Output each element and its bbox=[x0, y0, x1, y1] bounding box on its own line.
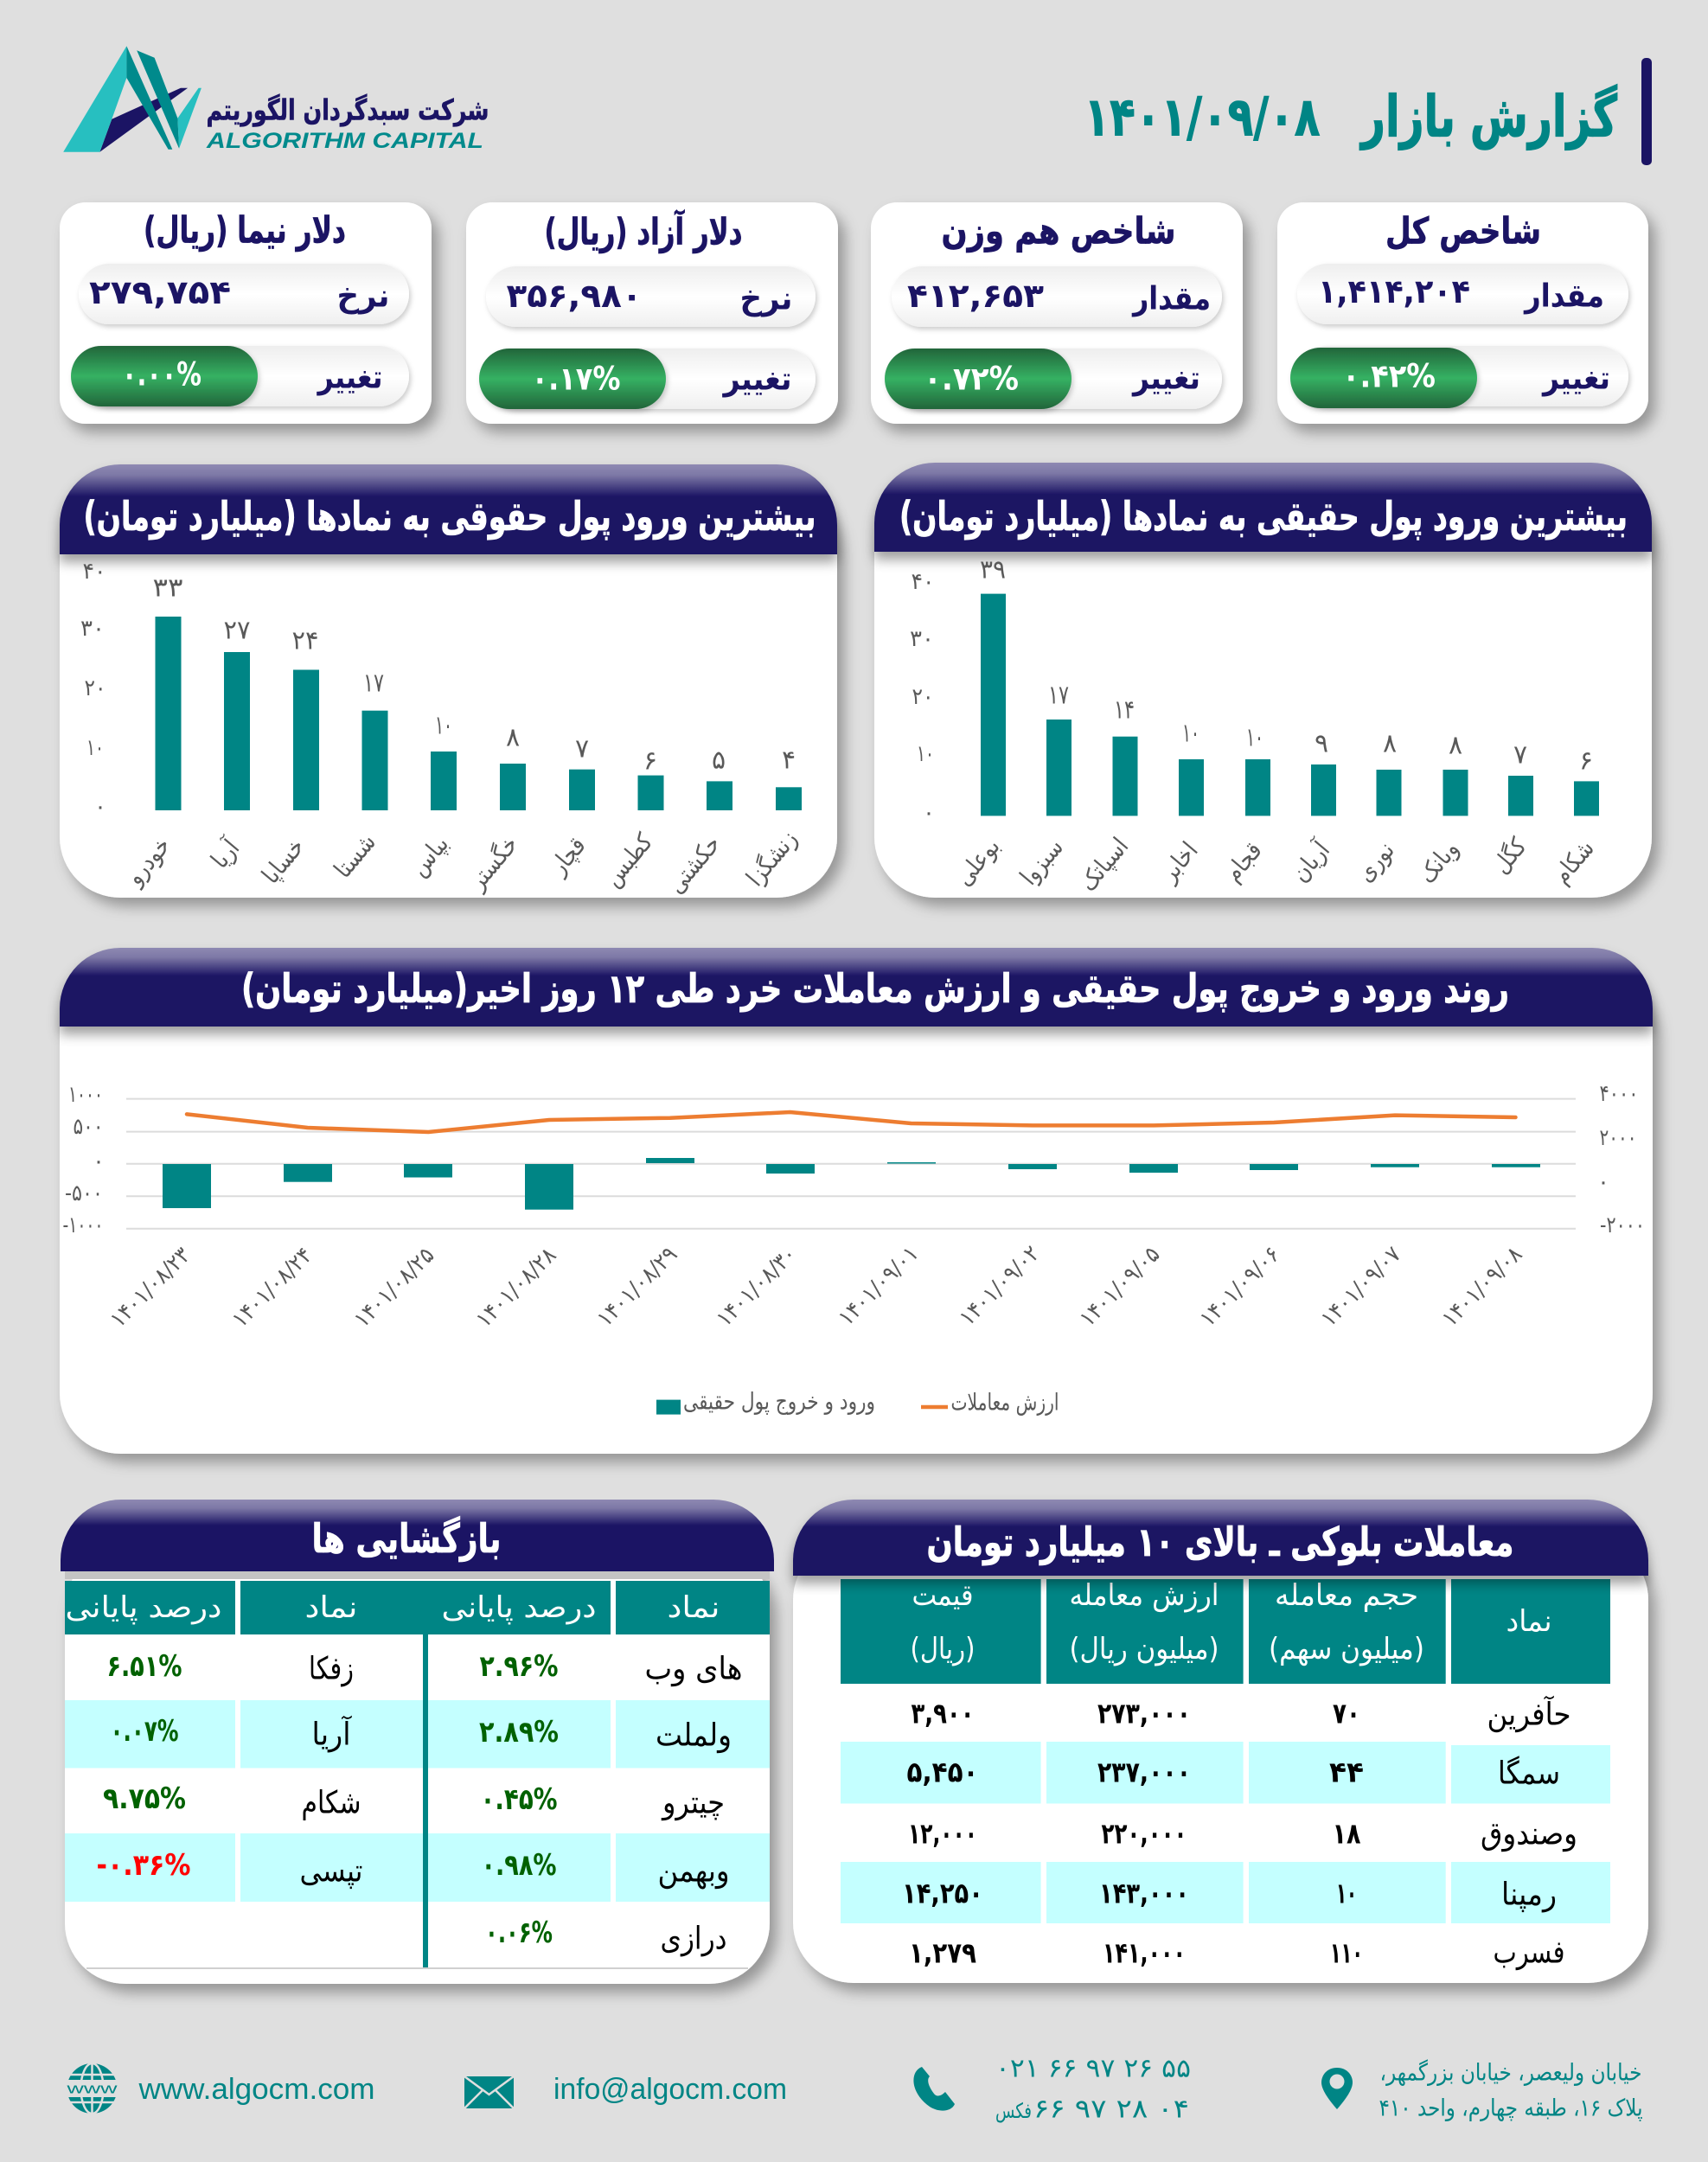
left axis labels: ۰ bbox=[93, 1148, 105, 1174]
rate pill: نرخ bbox=[337, 277, 389, 315]
fax number: فکس bbox=[995, 2099, 1032, 2123]
change pill bbox=[479, 349, 816, 409]
category labels: آریان bbox=[1285, 835, 1336, 888]
category labels bbox=[950, 832, 1600, 897]
date labels: ۱۴۰۱/۰۹/۰۱ bbox=[834, 1241, 924, 1331]
data labels: ۱۰ bbox=[435, 711, 452, 740]
data labels bbox=[980, 555, 1593, 777]
row: vasandogh: ۲۲۰,۰۰۰ bbox=[1102, 1816, 1187, 1851]
panel: block trades table bbox=[793, 1500, 1648, 1983]
category labels: خساپا bbox=[257, 834, 310, 889]
y axis labels: ۳۰ bbox=[910, 626, 934, 652]
trading value line bbox=[187, 1112, 1515, 1132]
value pill bbox=[1297, 264, 1628, 324]
left percents bbox=[97, 1649, 190, 1883]
y axis labels: ۴۰ bbox=[83, 559, 106, 585]
card: equal weight index bbox=[871, 202, 1243, 424]
website: www.algocm.com bbox=[138, 2073, 375, 2106]
column headings: (میلیون سهم) bbox=[1269, 1632, 1424, 1666]
panel header: معاملات بلوکی ـ بالای ۱۰ میلیارد تومان bbox=[927, 1519, 1513, 1565]
panel header: بازگشایی ها bbox=[311, 1515, 502, 1562]
right percents: ۰.۰۶% bbox=[485, 1916, 553, 1950]
data labels: ۳۳ bbox=[152, 572, 183, 604]
category labels: شکام bbox=[1548, 835, 1600, 890]
date labels: ۱۴۰۱/۰۹/۰۵ bbox=[1075, 1242, 1165, 1332]
category labels: بپاس bbox=[405, 830, 455, 882]
data labels: ۸ bbox=[506, 723, 520, 752]
category labels: آریا bbox=[205, 833, 246, 874]
data labels: ۱۷ bbox=[363, 668, 384, 699]
category labels: اسپاتک bbox=[1074, 833, 1135, 897]
row: semga: ۵,۴۵۰ bbox=[906, 1756, 979, 1788]
row: fasrob: ۱۴۱,۰۰۰ bbox=[1103, 1935, 1186, 1970]
right axis labels: ۴۰۰۰ bbox=[1600, 1081, 1638, 1107]
table bbox=[65, 1581, 770, 1969]
category labels: حکشتی bbox=[662, 830, 726, 899]
category labels: سبزوا bbox=[1015, 834, 1069, 891]
row: semga: ۴۴ bbox=[1329, 1756, 1364, 1788]
rate pill bbox=[486, 266, 816, 327]
row: vasandogh: وصندوق bbox=[1481, 1816, 1577, 1852]
right symbols: چیترو bbox=[661, 1785, 725, 1821]
change pill bbox=[885, 349, 1222, 409]
right symbols bbox=[645, 1652, 742, 1956]
panel: real money inflow chart bbox=[874, 463, 1652, 898]
flow bars bbox=[163, 1158, 1540, 1210]
change pill bbox=[71, 346, 409, 406]
card title: دلار نیما (ریال) bbox=[144, 209, 346, 251]
y axis labels: ۴۰ bbox=[912, 569, 934, 595]
row: vasandogh: ۱۲,۰۰۰ bbox=[908, 1816, 977, 1851]
category labels: شستا bbox=[329, 828, 381, 884]
report date: ۱۴۰۱/۰۹/۰۸ bbox=[1084, 85, 1320, 149]
bars bbox=[156, 617, 802, 810]
row: fasrob: فسرب bbox=[1493, 1935, 1565, 1970]
striped rows bbox=[841, 1742, 1610, 1923]
icon: globe bbox=[66, 2063, 118, 2114]
right axis labels bbox=[1597, 1081, 1645, 1238]
data labels: ۶ bbox=[1579, 745, 1593, 777]
row: vasandogh: ۱۸ bbox=[1332, 1816, 1361, 1851]
data labels: ۳۹ bbox=[980, 555, 1006, 585]
row: hafarin: ۷۰ bbox=[1333, 1697, 1360, 1730]
change pill: تغییر bbox=[317, 358, 382, 396]
left percents: ۶.۵۱% bbox=[107, 1649, 182, 1684]
card title: شاخص هم وزن bbox=[941, 209, 1176, 253]
panel: institutional money inflow chart bbox=[60, 464, 837, 899]
data labels: ۱۴ bbox=[1114, 695, 1135, 725]
panel: reopenings table bbox=[61, 1500, 774, 1984]
data labels bbox=[152, 572, 796, 777]
card: nima dollar bbox=[60, 202, 432, 424]
address: پلاک ۱۶، طبقه چهارم، واحد ۴۱۰ bbox=[1379, 2095, 1643, 2122]
left axis labels: ۵۰۰ bbox=[73, 1114, 104, 1140]
panel header bbox=[60, 464, 837, 554]
change pill: ۰.۰۰% bbox=[122, 356, 202, 393]
date labels: ۱۴۰۱/۰۸/۳۰ bbox=[712, 1242, 802, 1332]
row: hafarin: حآفرین bbox=[1487, 1695, 1570, 1733]
legend: ارزش معاملات bbox=[951, 1389, 1059, 1417]
table bbox=[841, 1578, 1610, 1970]
change pill bbox=[1290, 346, 1628, 408]
date labels: ۱۴۰۱/۰۸/۲۳ bbox=[106, 1243, 195, 1333]
panel header bbox=[61, 1500, 774, 1579]
right axis labels: ۰ bbox=[1597, 1169, 1609, 1195]
left percents: ۹.۷۵% bbox=[103, 1781, 186, 1816]
right symbols: ولملت bbox=[656, 1717, 732, 1754]
row: fasrob bbox=[909, 1935, 1565, 1970]
date labels: ۱۴۰۱/۰۸/۲۸ bbox=[471, 1243, 561, 1333]
row: fasrob: ۱,۲۷۹ bbox=[909, 1935, 976, 1970]
row: hafarin: ۲۷۳,۰۰۰ bbox=[1097, 1697, 1191, 1730]
data labels: ۱۰ bbox=[1182, 718, 1199, 749]
y axis labels: ۲۰ bbox=[912, 684, 934, 710]
left axis labels: -۱۰۰۰ bbox=[62, 1212, 104, 1238]
change pill: ۰.۴۲% bbox=[1342, 358, 1436, 394]
column headings bbox=[910, 1578, 1551, 1666]
date labels: ۱۴۰۱/۰۹/۰۲ bbox=[955, 1241, 1045, 1331]
icon: globe: www bbox=[66, 2081, 118, 2096]
date labels: ۱۴۰۱/۰۹/۰۷ bbox=[1316, 1242, 1406, 1332]
left axis labels: ۱۰۰۰ bbox=[68, 1082, 103, 1108]
data labels: ۲۷ bbox=[223, 616, 251, 645]
right percents: ۰.۴۵% bbox=[481, 1782, 557, 1817]
data labels: ۲۴ bbox=[292, 626, 318, 656]
value pill bbox=[892, 266, 1222, 327]
data labels: ۱۷ bbox=[1048, 680, 1069, 711]
column headings: نماد bbox=[668, 1590, 720, 1625]
category labels: کگل bbox=[1487, 832, 1532, 880]
striped rows bbox=[65, 1700, 770, 1902]
company name latin: ALGORITHM CAPITAL bbox=[206, 129, 483, 153]
column headings: نماد bbox=[304, 1590, 358, 1625]
address bbox=[1379, 2058, 1643, 2122]
column headings: حجم معامله bbox=[1275, 1578, 1418, 1613]
bars bbox=[981, 594, 1599, 816]
fax number: ۶۶ ۹۷ ۲۸ ۰۴ bbox=[1033, 2095, 1189, 2124]
category labels: قجام bbox=[1219, 837, 1268, 887]
row: vasandogh bbox=[908, 1816, 1577, 1852]
rate pill: ۳۵۶,۹۸۰ bbox=[507, 277, 642, 315]
left symbols: آریا bbox=[311, 1714, 352, 1752]
card title: دلار آزاد (ریال) bbox=[545, 209, 742, 253]
card title: شاخص کل bbox=[1385, 209, 1541, 253]
value pill: مقدار bbox=[1131, 280, 1211, 317]
phone number: ۰۲۱ ۶۶ ۹۷ ۲۶ ۵۵ bbox=[995, 2053, 1191, 2084]
left axis labels: -۵۰۰ bbox=[65, 1180, 103, 1206]
row: hafarin: ۳,۹۰۰ bbox=[912, 1697, 974, 1730]
left symbols: شکام bbox=[301, 1785, 361, 1821]
category labels: نوری bbox=[1352, 837, 1400, 887]
right symbols: درازی bbox=[661, 1922, 726, 1956]
left symbols: زفکا bbox=[309, 1652, 354, 1686]
table header cells bbox=[841, 1579, 1610, 1684]
change pill: تغییر bbox=[722, 360, 792, 398]
row: fasrob: ۱۱۰ bbox=[1330, 1935, 1363, 1970]
y axis labels bbox=[80, 559, 106, 820]
column headings: درصد پایانی bbox=[441, 1590, 597, 1625]
data labels: ۷ bbox=[575, 733, 589, 764]
right percents bbox=[479, 1649, 559, 1950]
column headings: (میلیون ریال) bbox=[1069, 1632, 1219, 1666]
row: remapna: ۱۰ bbox=[1336, 1877, 1357, 1909]
card: free dollar bbox=[466, 202, 838, 424]
left symbols: تپسی bbox=[299, 1854, 363, 1889]
row: remapna: رمپنا bbox=[1501, 1877, 1557, 1913]
right axis labels: -۲۰۰۰ bbox=[1600, 1212, 1645, 1238]
change pill: ۰.۷۲% bbox=[924, 360, 1019, 398]
row: remapna: ۱۴۳,۰۰۰ bbox=[1099, 1877, 1189, 1909]
category labels: وبانک bbox=[1413, 835, 1465, 889]
rate pill bbox=[79, 264, 409, 324]
change pill: ۰.۱۷% bbox=[531, 360, 621, 398]
address: خیابان ولیعصر، خیابان بزرگمهر، bbox=[1380, 2058, 1641, 2086]
header cells bbox=[65, 1581, 770, 1634]
email: info@algocm.com bbox=[553, 2073, 787, 2106]
date labels: ۱۴۰۱/۰۸/۲۹ bbox=[592, 1242, 682, 1332]
panel header: بیشترین ورود پول حقوقی به نمادها (میلیارد تومان) bbox=[83, 493, 816, 540]
right percents: ۲.۹۶% bbox=[479, 1649, 559, 1684]
data labels: ۸ bbox=[1449, 730, 1462, 761]
column headings bbox=[66, 1590, 720, 1625]
right symbols: های وب bbox=[645, 1652, 742, 1686]
category labels: زنشگزا bbox=[740, 825, 803, 892]
date labels: ۱۴۰۱/۰۹/۰۶ bbox=[1195, 1242, 1285, 1332]
column headings: ارزش معامله bbox=[1069, 1578, 1219, 1613]
left percents: -۰.۳۶% bbox=[97, 1848, 190, 1883]
right axis labels: ۲۰۰۰ bbox=[1600, 1125, 1636, 1151]
right percents: ۲.۸۹% bbox=[479, 1715, 559, 1749]
row: remapna bbox=[902, 1877, 1557, 1913]
date labels: ۱۴۰۱/۰۸/۲۵ bbox=[349, 1243, 439, 1333]
y axis labels: ۱۰ bbox=[86, 735, 104, 761]
category labels: بوعلی bbox=[950, 833, 1006, 892]
card: total index bbox=[1277, 202, 1648, 424]
date labels bbox=[106, 1241, 1527, 1333]
legend: ورود و خروج پول حقیقی bbox=[683, 1389, 875, 1415]
data labels: ۸ bbox=[1383, 728, 1397, 759]
value pill: ۴۱۲,۶۵۳ bbox=[907, 277, 1044, 315]
icon: mail bbox=[464, 2076, 514, 2108]
icon: location pin bbox=[1321, 2068, 1353, 2109]
footer bbox=[66, 2053, 1643, 2124]
date labels: ۱۴۰۱/۰۹/۰۸ bbox=[1437, 1242, 1527, 1332]
panel: 12 day trend chart bbox=[60, 948, 1653, 1454]
right symbols: وبهمن bbox=[657, 1854, 730, 1889]
row: semga: سمگا bbox=[1498, 1756, 1560, 1792]
data labels: ۴ bbox=[782, 745, 796, 775]
left symbols bbox=[299, 1652, 363, 1889]
panel header bbox=[874, 463, 1652, 552]
company name persian: شرکت سبدگردان الگوریتم bbox=[206, 93, 489, 128]
left percents: ۰.۰۷% bbox=[111, 1714, 178, 1749]
panel header bbox=[793, 1500, 1648, 1576]
category labels: خودرو bbox=[120, 832, 176, 892]
data labels: ۱۰ bbox=[1246, 723, 1263, 752]
data labels: ۶ bbox=[643, 745, 657, 777]
bottom rule bbox=[86, 1967, 748, 1969]
panel header bbox=[60, 948, 1653, 1027]
value pill: ۱,۴۱۴,۲۰۴ bbox=[1318, 272, 1470, 310]
column headings: نماد bbox=[1506, 1604, 1551, 1639]
value pill: مقدار bbox=[1523, 277, 1604, 315]
y axis labels: ۰ bbox=[94, 794, 106, 820]
change pill: تغییر bbox=[1541, 360, 1610, 396]
category labels: اخابر bbox=[1155, 837, 1204, 888]
data labels: ۷ bbox=[1513, 740, 1527, 770]
column headings: (ریال) bbox=[910, 1632, 976, 1666]
column headings: درصد پایانی bbox=[66, 1590, 221, 1625]
logo bbox=[63, 46, 489, 153]
category labels: خگستر bbox=[462, 830, 524, 897]
date labels: ۱۴۰۱/۰۸/۲۴ bbox=[227, 1243, 317, 1333]
icon: phone bbox=[913, 2067, 955, 2111]
y axis labels: ۰ bbox=[923, 800, 935, 826]
title accent bar bbox=[1641, 58, 1652, 165]
legend bbox=[656, 1389, 1059, 1417]
data labels: ۵ bbox=[712, 745, 726, 775]
row: semga: ۲۳۷,۰۰۰ bbox=[1097, 1756, 1191, 1788]
row: semga bbox=[906, 1756, 1560, 1792]
rate pill: نرخ bbox=[740, 280, 792, 317]
data labels: ۹ bbox=[1315, 728, 1328, 759]
column headings: قیمت bbox=[912, 1578, 974, 1613]
title bbox=[1084, 58, 1652, 165]
category labels bbox=[120, 825, 803, 899]
center divider bbox=[423, 1634, 428, 1968]
row: hafarin bbox=[912, 1695, 1570, 1733]
rate pill: ۲۷۹,۷۵۴ bbox=[89, 273, 231, 311]
change pill: تغییر bbox=[1131, 360, 1200, 396]
left axis labels bbox=[62, 1082, 105, 1238]
y axis labels: ۳۰ bbox=[80, 616, 105, 642]
category labels: قچار bbox=[544, 832, 592, 881]
y axis labels: ۲۰ bbox=[85, 675, 106, 701]
right percents: ۰.۹۸% bbox=[481, 1848, 557, 1883]
row: remapna: ۱۴,۲۵۰ bbox=[902, 1877, 983, 1909]
logo mark bbox=[63, 46, 202, 152]
y axis labels: ۱۰ bbox=[917, 741, 934, 767]
report heading: گزارش بازار bbox=[1359, 83, 1617, 150]
category labels: کطبس bbox=[598, 828, 659, 892]
y axis labels bbox=[910, 569, 935, 826]
